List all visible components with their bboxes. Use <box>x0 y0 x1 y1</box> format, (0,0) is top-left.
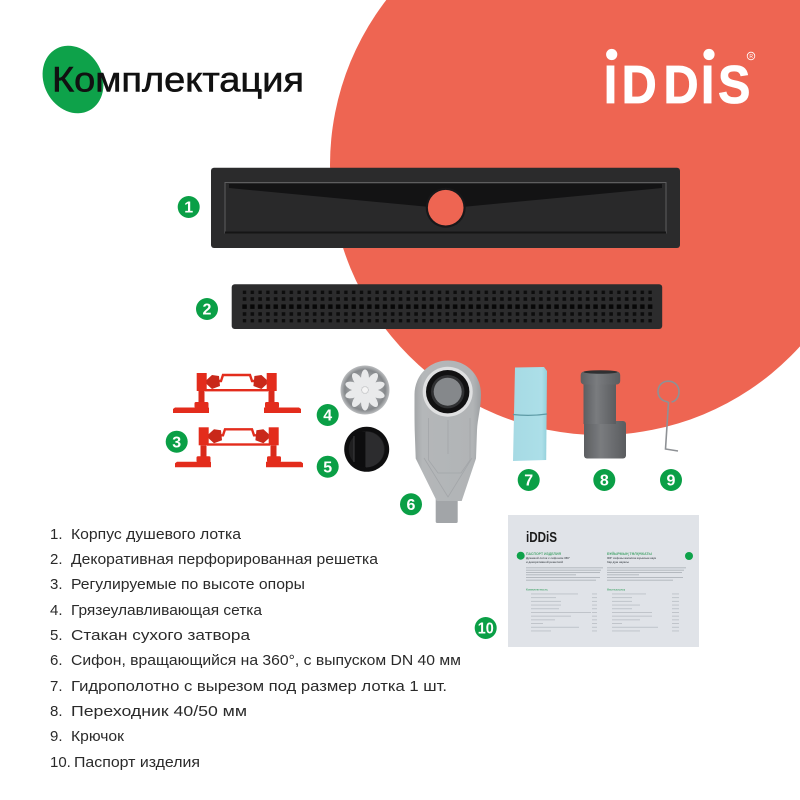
badge 8: 8 <box>600 473 609 490</box>
list item 6: Сифон, вращающийся на 360°, с выпуском DN 40 мм <box>71 652 461 669</box>
badge 6 <box>400 493 422 515</box>
support top <box>173 373 301 413</box>
badge 2 <box>196 298 218 320</box>
badge 4 <box>317 404 339 426</box>
list item 2: Декоративная перфорированная решетка <box>71 551 379 568</box>
green blob <box>31 35 115 124</box>
badge 5 <box>317 456 339 478</box>
item 7: waterproofing cloth <box>513 367 547 461</box>
list item 7: 7. <box>50 678 63 695</box>
item 4: strainer <box>340 366 390 414</box>
list item 1: 1. <box>50 526 63 543</box>
item 8: adapter <box>581 370 626 458</box>
list item 8: Переходник 40/50 мм <box>71 703 247 720</box>
list item 9: Крючок <box>71 728 124 745</box>
badge 5: 5 <box>323 459 332 476</box>
support bottom <box>175 427 303 467</box>
badge 9 <box>660 469 682 491</box>
badge 4: 4 <box>323 408 332 425</box>
badge 3: 3 <box>172 434 181 451</box>
list item 3: 3. <box>50 576 63 593</box>
item 10: product passport: ПАСПОРТ ИЗДЕЛИЯ <box>526 552 561 556</box>
item 3: adjustable supports <box>173 373 303 467</box>
badge 8 <box>593 469 615 491</box>
badge 10 <box>475 617 497 639</box>
badge 3 <box>166 431 188 453</box>
list item 7: Гидрополотно с вырезом под размер лотка 1 шт. <box>71 678 447 695</box>
background coral circle <box>330 0 800 435</box>
list item 5: 5. <box>50 627 63 644</box>
badge 1: 1 <box>184 200 193 217</box>
list item 6: 6. <box>50 652 63 669</box>
badge 2: 2 <box>203 302 212 319</box>
IDDIS logo: IDDIS <box>604 54 750 115</box>
badge 7: 7 <box>524 473 533 490</box>
list item 1: Корпус душевого лотка <box>71 526 242 543</box>
item 10: product passport: Жиынтықтылық <box>606 588 625 592</box>
item 10: product passport: Комплектность <box>526 588 548 592</box>
list item 9: 9. <box>50 728 63 745</box>
list item 10: Паспорт изделия <box>74 754 200 771</box>
item 10: product passport: Душевой лоток с сифоном 360° <box>526 556 571 560</box>
list item 4: Грязеулавливающая сетка <box>71 602 263 619</box>
badge 9: 9 <box>667 473 676 490</box>
item 5: dry trap cup <box>344 427 389 472</box>
title with green blob <box>31 35 304 124</box>
badge 6: 6 <box>407 497 416 514</box>
item 6: siphon <box>414 360 481 523</box>
item 10: product passport: iDDiS <box>526 529 557 546</box>
item 10: product passport <box>508 515 699 647</box>
item 10: product passport: БҰЙЫРМЫҢ ТӨЛҚҰЖАТЫ <box>607 552 652 556</box>
list item 5: Стакан сухого затвора <box>71 627 251 644</box>
item 2: perforated grate <box>232 284 662 329</box>
list item 10: 10. <box>50 754 71 771</box>
list item 8: 8. <box>50 703 63 720</box>
item 10: product passport: 360° сифоны жасалған жуынғыш науа <box>607 556 656 560</box>
item 1: shower tray body <box>211 168 680 248</box>
item 10: product passport: и декоративной решеткой <box>526 560 563 564</box>
list item 4: 4. <box>50 602 63 619</box>
list item 3: Регулируемые по высоте опоры <box>71 576 305 593</box>
item 9: hook <box>658 381 679 451</box>
IDDIS logo: R <box>749 54 753 60</box>
badge 10: 10 <box>478 621 494 638</box>
numbered parts list <box>50 526 461 771</box>
badge 1 <box>178 196 200 218</box>
title text: Комплектация <box>52 60 304 100</box>
list item 2: 2. <box>50 551 63 568</box>
item 10: product passport: бар душ науасы <box>607 560 629 564</box>
badge 7 <box>518 469 540 491</box>
